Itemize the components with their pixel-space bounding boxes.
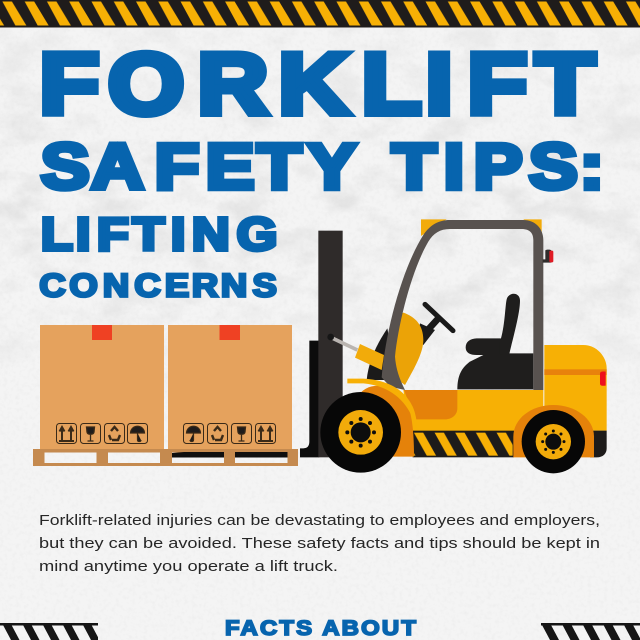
body main bbox=[403, 390, 543, 455]
rear body stripe bbox=[544, 369, 607, 375]
paragraph line 1: Forklift-related injuries can be devastating to employees and employers, bbox=[39, 512, 600, 529]
paragraph line 3: mind anytime you operate a lift truck. bbox=[39, 558, 338, 575]
forklift bbox=[300, 219, 607, 473]
section heading: FACTS ABOUT bbox=[225, 616, 416, 640]
title bbox=[39, 36, 604, 304]
rear body bbox=[544, 345, 607, 431]
hydraulic cylinder body bbox=[355, 344, 384, 370]
title line: CONCERNS: CONCERNS bbox=[39, 269, 277, 304]
fork bbox=[300, 341, 319, 457]
intro paragraph bbox=[39, 512, 600, 575]
mirror bbox=[543, 250, 553, 263]
hydraulic cylinder rod bbox=[331, 337, 357, 350]
box right bbox=[168, 325, 292, 449]
pallet base bbox=[33, 449, 298, 466]
fork blades through pallet bbox=[172, 452, 288, 458]
mast bbox=[318, 231, 343, 457]
rear wheel bbox=[522, 410, 585, 473]
rear counterweight bbox=[590, 431, 607, 457]
hydraulic pivot bbox=[327, 334, 334, 340]
pallet with two boxes bbox=[33, 325, 298, 466]
background: concrete texture bbox=[0, 28, 640, 358]
seat bbox=[457, 294, 533, 389]
front fender trim bbox=[347, 379, 417, 430]
bottom right hazard stripes bbox=[541, 623, 640, 640]
steering wheel bbox=[417, 304, 453, 345]
dashboard panel bbox=[393, 313, 423, 385]
cab roof corners bbox=[421, 219, 542, 236]
box right handling icons bbox=[184, 424, 276, 444]
front fender bbox=[362, 386, 414, 457]
box left handling icons bbox=[56, 424, 148, 444]
front wheel bbox=[320, 392, 401, 473]
title line: FORKLIFT: FORKLIFT bbox=[40, 36, 595, 132]
bottom left hazard stripes bbox=[0, 623, 98, 640]
lower hazard stripe panel bbox=[413, 431, 514, 457]
dashboard rear shadow bbox=[367, 328, 397, 380]
box left bbox=[40, 325, 164, 449]
title line: SAFETY TIPS: SAFETY TIPS: bbox=[41, 130, 604, 202]
rear fender bbox=[513, 405, 594, 457]
cab frame bbox=[382, 220, 543, 390]
paragraph line 2: but they can be avoided. These safety facts and tips should be kept in bbox=[39, 535, 600, 552]
tail light bbox=[600, 372, 606, 386]
title line: LIFTING: LIFTING bbox=[41, 209, 277, 260]
footwell panel bbox=[404, 390, 457, 419]
top hazard stripe band bbox=[0, 0, 640, 28]
